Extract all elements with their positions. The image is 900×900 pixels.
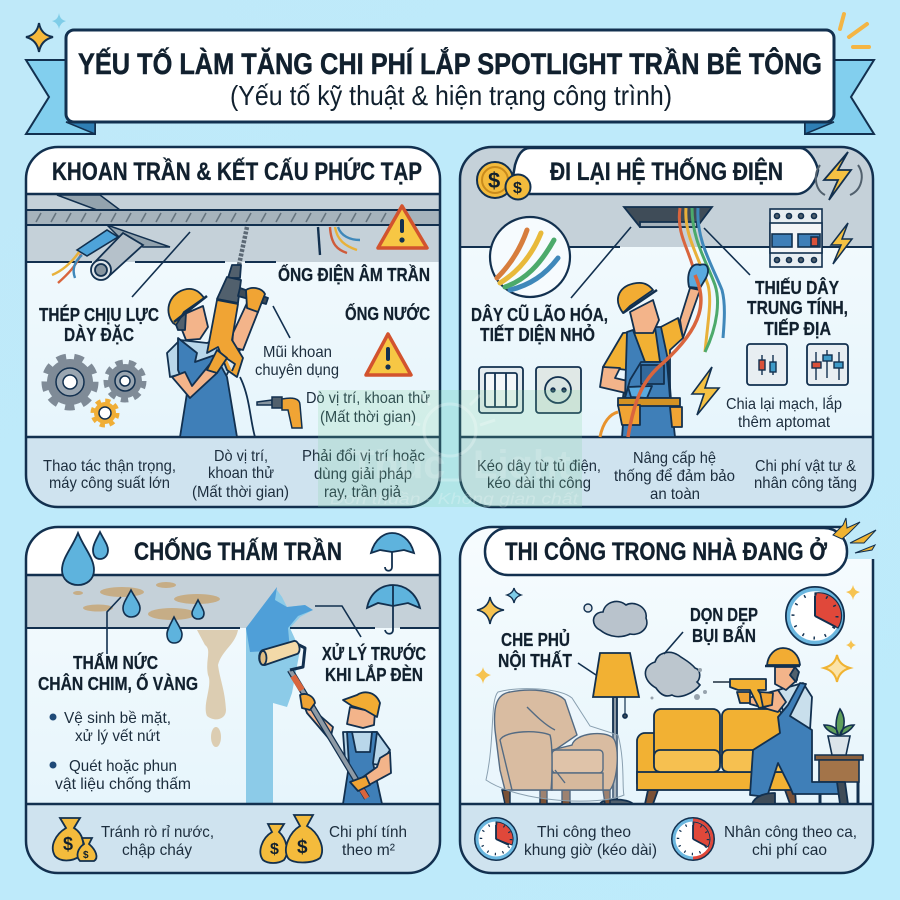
note: Nhân công theo ca, [724,824,857,841]
panel: khoan trần [26,147,440,507]
label: TIẾT DIỆN NHỎ [480,324,595,345]
heading: CHỐNG THẤM TRẦN [134,536,342,566]
heading pill [485,528,847,575]
icon: hand drill [257,397,302,428]
icon: money bags: $ [270,841,279,858]
heading: ĐI LẠI HỆ THỐNG ĐIỆN [550,156,783,186]
ribbon left [26,60,95,134]
bottom notes: Thao tác thận trọng, [43,458,176,475]
label [498,629,572,671]
label [690,605,758,646]
bullet list: vật liệu chống thấm [55,776,191,793]
leader line [273,306,290,338]
label: ỐNG ĐIỆN ÂM TRẦN [278,264,430,285]
icon: falling drops [123,590,204,643]
icon: wire circle [490,217,570,297]
icon: sparks [833,518,876,553]
bottom notes: khoan thử [208,465,274,482]
bottom notes: ray, trần giả [324,484,401,501]
note: (Mất thời gian) [320,409,416,426]
watermark [318,390,582,508]
icon: pipe [91,233,143,280]
icon: switch [479,367,523,413]
label: BỤI BẨN [692,625,756,646]
panel: nhà đang ở [460,518,878,873]
note: Tránh rò rỉ nước, [101,824,214,841]
label: TRUNG TÍNH, [747,297,848,318]
label: CHÂN CHIM, Ố VÀNG [38,673,198,694]
bottom notes: thống để đảm bảo [614,467,735,485]
leader line [315,606,361,637]
note [329,824,407,859]
panel: đi lại điện [460,147,873,507]
label: THẤM NỨC [73,652,158,673]
title box [66,30,834,122]
cloud [584,601,647,637]
bottom notes: kéo dài thi công [487,475,591,492]
icon: ceiling opening [624,207,712,227]
icon: umbrella [371,533,414,571]
sparkles [475,585,860,684]
icon: lightning [692,367,719,415]
note: Thi công theo [537,824,631,841]
icon: socket [536,367,581,413]
note: khung giờ (kéo dài) [524,842,657,859]
icon: aptomat [807,344,848,385]
label: XỬ LÝ TRƯỚC [322,643,426,664]
icon: lightning [816,152,862,200]
bullet list [50,710,191,793]
icon: coins: $ [488,168,500,193]
bottom notes: Phải đổi vị trí hoặc [302,447,425,465]
bottom notes: Dò vị trí, [214,448,268,465]
label: NỘI THẤT [498,650,572,671]
subtitle: (Yếu tố kỹ thuật & hiện trạng công trình) [230,80,672,111]
orange wire [628,275,701,437]
worker with drill [713,648,848,804]
cloud of dust [645,652,707,700]
label: Mũi khoan [263,344,332,361]
watermark: Thuc [350,443,446,487]
bullet list: Quét hoặc phun [69,758,177,775]
note: Chi phí tính [329,824,407,841]
icon: money bag [53,818,96,861]
label: CHE PHỦ [501,629,570,650]
leader lines [571,227,750,298]
icon: clock [475,818,517,860]
note [724,824,857,859]
bullet list: Vệ sinh bề mặt, [64,710,171,727]
bottom notes: dùng giải pháp [314,466,412,483]
label: DÀY ĐẶC [64,324,134,345]
bottom notes [43,447,425,501]
ribbon right [805,60,874,134]
side table with plant [815,709,863,804]
sparkle blue [52,13,66,29]
leader line [132,232,190,297]
heading pill [510,148,818,194]
paint swath [246,590,313,804]
label: THIẾU DÂY [755,277,839,298]
label [39,304,159,345]
icon: cable [52,230,118,283]
label: THÉP CHỊU LỰC [39,304,159,325]
bottom notes: máy công suất lớn [49,475,170,492]
label: TIẾP ĐỊA [764,318,831,339]
bullet list: xử lý vết nứt [75,728,161,745]
label: DỌN DẸP [690,605,758,625]
icon: lightning [831,223,852,264]
label: ỐNG NƯỚC [345,303,430,324]
sofa [637,709,796,804]
panel: chống thấm [26,527,440,873]
wires behind worker [679,208,724,352]
label: KHI LẮP ĐÈN [325,664,423,685]
corner patch [846,520,878,559]
note: Dò vị trí, khoan thử [306,390,430,407]
bottom notes: Nâng cấp hệ [633,450,716,467]
icon: money bag: $ [63,834,73,854]
stains [73,582,220,620]
note: thêm aptomat [738,414,831,431]
leader lines [578,632,683,681]
bottom notes: nhân công tăng [754,475,857,492]
armchair [495,690,617,804]
icon: coins [477,162,530,200]
stain drip [197,630,238,719]
icon: circuit switch [747,344,787,385]
icon: warning [366,334,411,375]
note: theo m² [342,842,396,859]
icon: coins: $ [513,180,522,197]
icon: wires [318,227,360,255]
label: chuyên dụng [255,362,339,379]
note: chập cháy [122,842,192,859]
leader line [107,597,121,654]
note [726,394,842,431]
icon: warning [378,206,427,248]
icon: lamp [593,653,639,804]
label [322,643,426,685]
bottom notes: Kéo dây từ tủ điện, [477,458,601,475]
note [101,824,214,859]
heading: THI CÔNG TRONG NHÀ ĐANG Ở [505,536,828,566]
note: chi phí cao [752,842,827,859]
watermark: Đơn thuần - Không gian chất [330,491,579,508]
worker with roller [259,641,391,804]
header banner [26,13,874,134]
bottom notes: Chi phí vật tư & [755,458,856,475]
label [471,304,608,345]
bottom notes: (Mất thời gian) [192,484,289,501]
icon: clock [672,818,714,860]
sun rays [840,14,869,47]
icon: gears [46,358,143,425]
plastic cover [486,689,624,801]
label: DÂY CŨ LÃO HÓA, [471,304,608,325]
icon: drops [62,532,108,585]
worker with wires [600,264,708,437]
icon: umbrella [367,585,420,634]
worker drilling [167,227,268,437]
bottom notes: an toàn [650,486,700,503]
label [38,652,198,694]
note: Chia lại mạch, lắp [726,394,842,413]
label [747,277,848,339]
icon: breaker panel [770,209,822,267]
watermark: Light [473,443,571,487]
bottom notes [477,450,857,503]
label [255,344,339,379]
icon: money bag: $ [83,850,89,861]
icon: money bags [260,815,322,863]
sparkle gold [26,23,53,52]
icon: money bags: $ [297,837,308,858]
note [524,824,657,859]
note [306,390,430,426]
heading: KHOAN TRẦN & KẾT CẤU PHỨC TẠP [52,156,422,186]
icon: clock [786,587,844,645]
